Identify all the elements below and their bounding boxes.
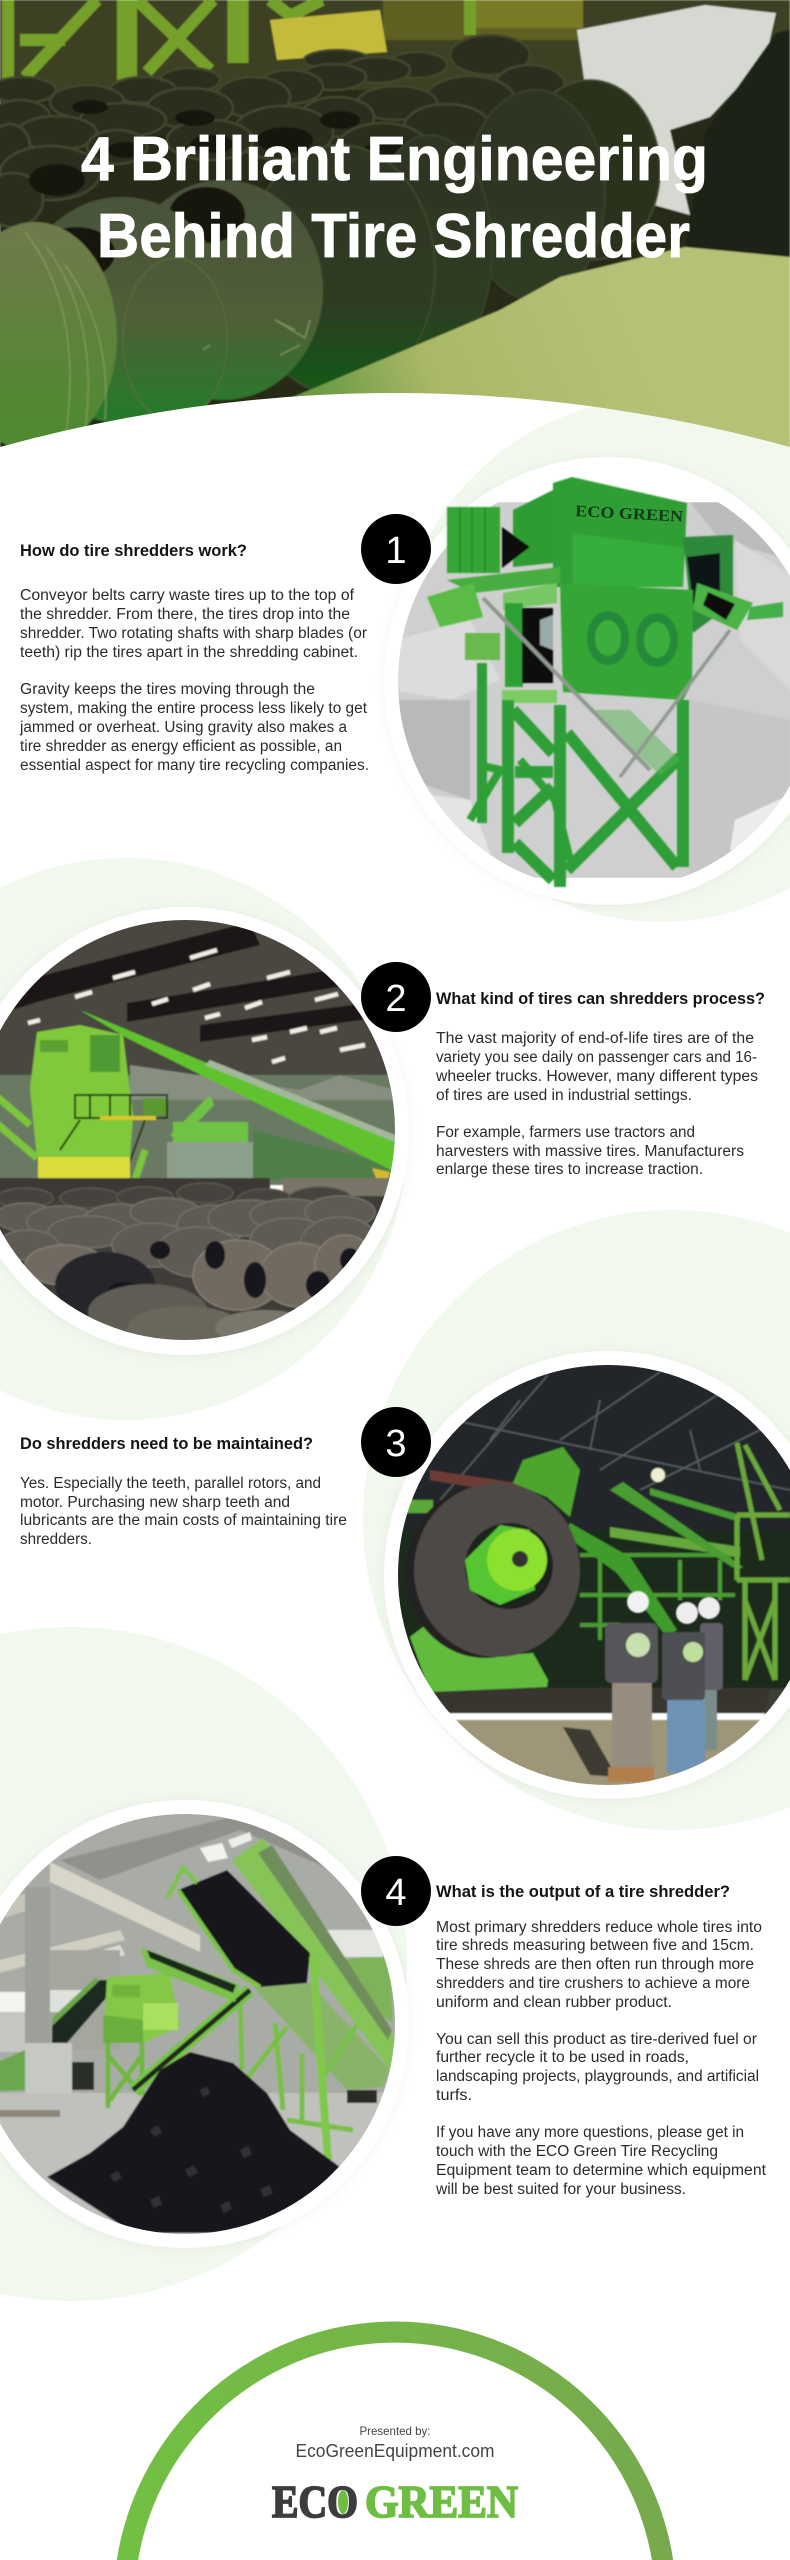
section 1 body: jammed or overheat. Using gravity also makes a: [19, 719, 347, 736]
section 4 body: Equipment team to determine which equipment: [436, 2162, 767, 2179]
section 3 body: lubricants are the main costs of maintaining tire: [20, 1512, 347, 1529]
number badge 3: [361, 1407, 431, 1477]
machine brand text: ECO GREEN: [575, 503, 684, 526]
footer presenter text: Presented by:: [360, 2424, 430, 2438]
section 2 body: For example, farmers use tractors and: [436, 1124, 695, 1141]
photo 2: shredding plant with conveyor and tire rows: [0, 907, 409, 1355]
section 2 body: wheeler trucks. However, many different types: [435, 1068, 758, 1085]
number badge 3: 3: [385, 1423, 407, 1465]
section 1 body: Gravity keeps the tires moving through the: [20, 681, 315, 698]
section 2 body: harvesters with massive tires. Manufacturers: [436, 1143, 744, 1160]
machine body and legs: [427, 477, 783, 887]
section 1 body: shredder. Two rotating shafts with sharp blades (or: [20, 625, 367, 642]
section 1 heading: How do tire shredders work?: [20, 541, 247, 560]
section 4 body: Most primary shredders reduce whole tires into: [436, 1919, 762, 1936]
footer logo: ECO GREEN: GREEN: [365, 2476, 518, 2527]
photo 4: conveyor dropping shredded rubber pile: [0, 1800, 409, 2253]
section 1 body: system, making the entire process less likely to get: [20, 700, 368, 717]
footer logo: ECO GREEN: ECO: [272, 2476, 358, 2527]
section 1 body: Conveyor belts carry waste tires up to the top of: [20, 587, 355, 604]
section 4 text block: [435, 1882, 767, 2198]
section 2 body: The vast majority of end-of-life tires are of the: [436, 1030, 754, 1047]
section 2 body: variety you see daily on passenger cars and 16-: [436, 1049, 757, 1066]
footer presenter text: EcoGreenEquipment.com: [296, 2441, 494, 2461]
section 3 body: Yes. Especially the teeth, parallel rotors, and: [20, 1475, 321, 1492]
section 4 body: If you have any more questions, please get in: [436, 2124, 744, 2141]
photo 3: workers beside giant tire on green tipper: [384, 1351, 790, 1800]
section 4 body: uniform and clean rubber product.: [436, 1994, 672, 2011]
section 2 heading: What kind of tires can shredders process?: [436, 989, 765, 1008]
footer green arc: [117, 2321, 673, 2560]
number badge 1: [361, 514, 431, 584]
section 4 body: will be best suited for your business.: [435, 2181, 686, 2198]
section 1 body: teeth) rip the tires apart in the shredding cabinet.: [20, 644, 358, 661]
section 4 heading: What is the output of a tire shredder?: [436, 1882, 730, 1901]
section 3 body: motor. Purchasing new sharp teeth and: [20, 1494, 290, 1511]
number badge 2: [361, 962, 431, 1032]
number badge 2: 2: [385, 978, 407, 1020]
section 4 body: These shreds are then often run through more: [436, 1956, 754, 1973]
section 1 body: the shredder. From there, the tires drop into the: [20, 606, 350, 623]
section 4 body: tire shreds measuring between five and 15cm.: [436, 1937, 754, 1954]
workers: [605, 1591, 723, 1782]
section 4 body: touch with the ECO Green Tire Recycling: [436, 2143, 718, 2160]
section 4 body: You can sell this product as tire-derived fuel or: [436, 2031, 757, 2048]
section 2 body: enlarge these tires to increase traction.: [436, 1161, 703, 1178]
header photo: rows of tires with green tint: [0, 0, 790, 452]
section 1 body: essential aspect for many tire recycling companies.: [20, 757, 369, 774]
section 1 body: [19, 587, 369, 774]
footer logo: ECO GREEN: [272, 2476, 518, 2527]
footer presenter text: [296, 2424, 494, 2461]
section 3 text block: [20, 1434, 347, 1548]
section 4 body: landscaping projects, playgrounds, and artificial: [436, 2068, 759, 2085]
section 2 body: of tires are used in industrial settings.: [436, 1087, 692, 1104]
number badge 4: [361, 1856, 431, 1926]
number badge 1: 1: [385, 530, 407, 572]
title: Behind Tire Shredder: [97, 202, 690, 271]
background blobs: [0, 398, 790, 2301]
section 3 heading: Do shredders need to be maintained?: [20, 1434, 313, 1453]
section 3 body: [20, 1475, 347, 1548]
section 1 body: tire shredder as energy efficient as possible, an: [20, 738, 342, 755]
section 4 body: turfs.: [436, 2087, 472, 2104]
title: [82, 134, 704, 258]
section 4 body: shredders and tire crushers to achieve a more: [436, 1975, 750, 1992]
section 4 body: further recycle it to be used in roads,: [436, 2049, 689, 2066]
photo 1: green tire shredder machine: [384, 457, 790, 905]
section 1 text block: [19, 541, 369, 774]
number badge 4: 4: [385, 1872, 407, 1914]
section 2 text block: [435, 989, 765, 1178]
section 4 body: [435, 1919, 767, 2198]
section 2 body: [435, 1030, 758, 1178]
title: 4 Brilliant Engineering: [81, 125, 708, 194]
section 3 body: shredders.: [20, 1531, 92, 1548]
